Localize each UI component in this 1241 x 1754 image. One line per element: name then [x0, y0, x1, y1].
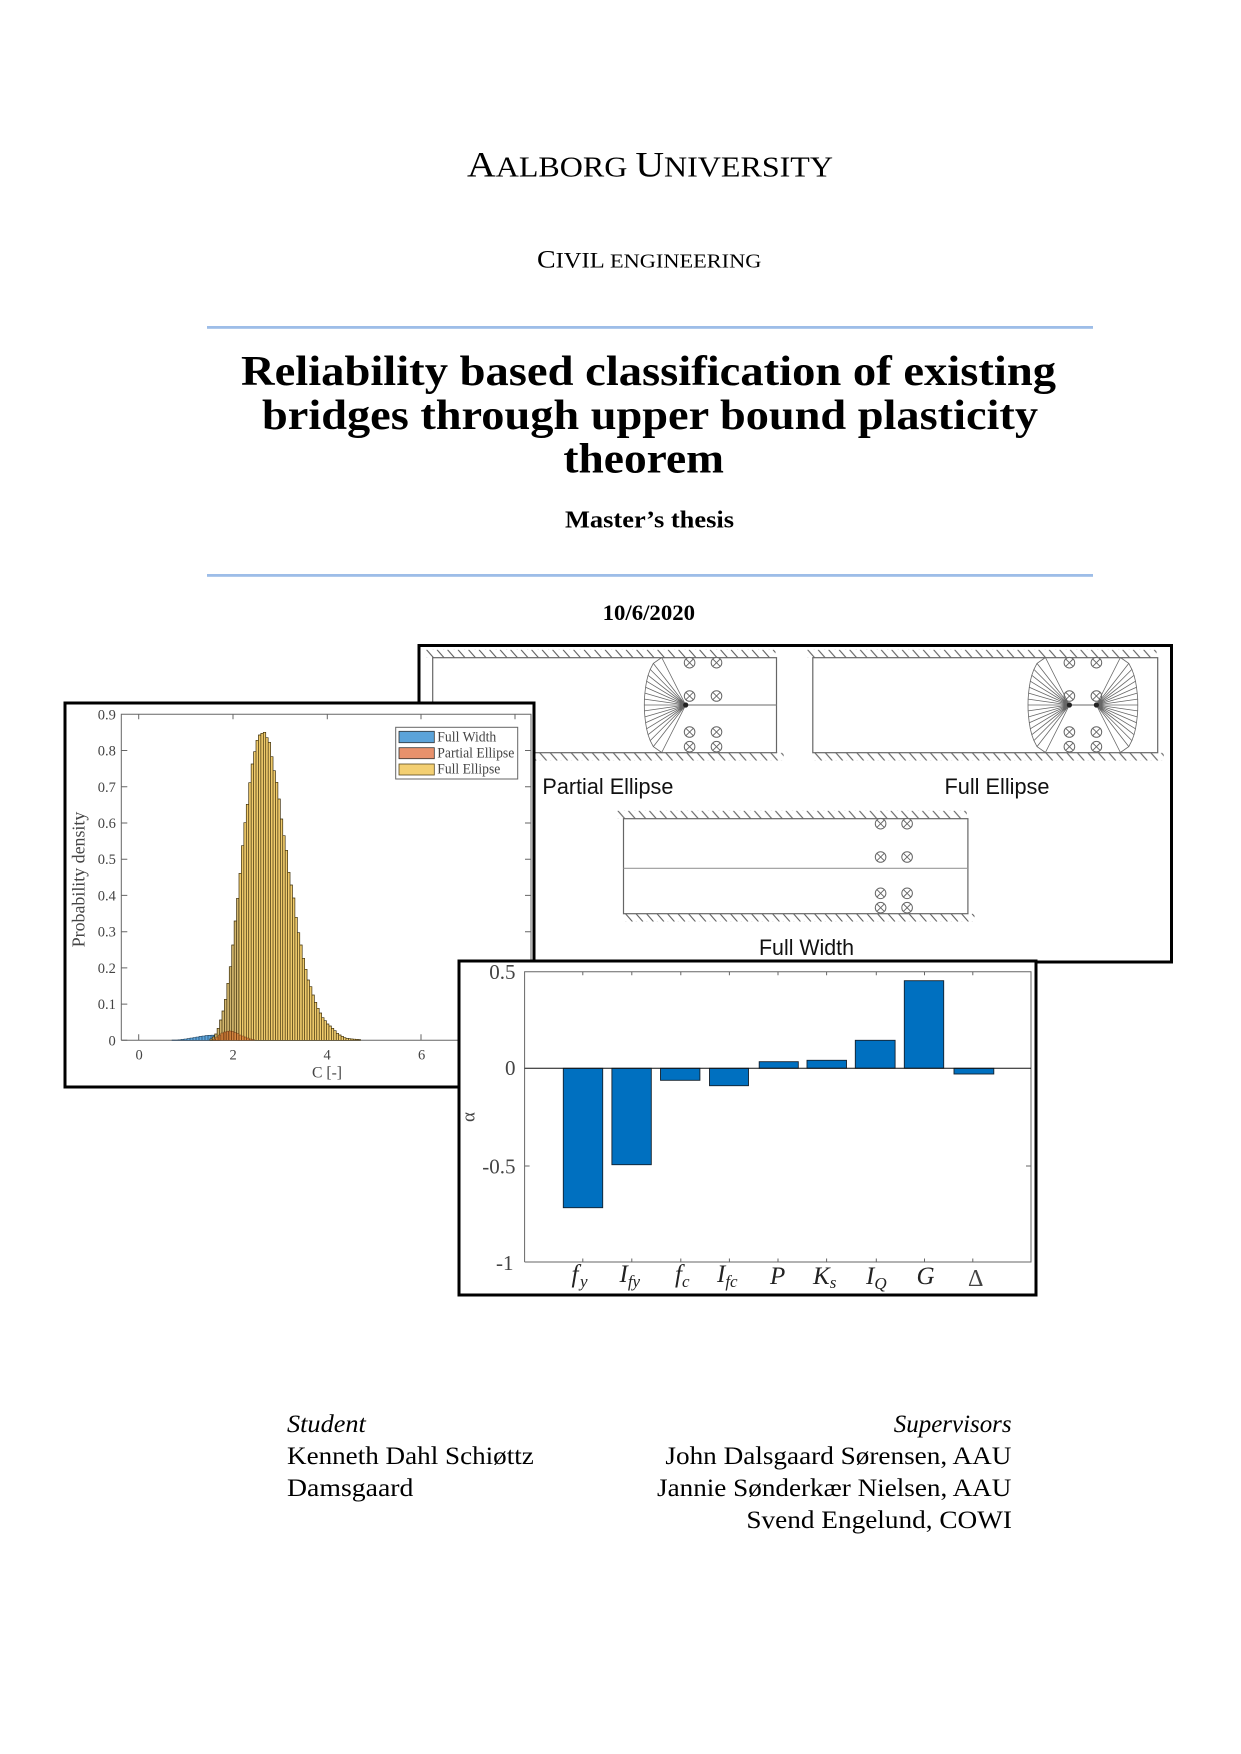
block: supervisors: John Dalsgaard Sørensen, AAU — [665, 1441, 1011, 1470]
y tick labels: 0.4 — [98, 888, 117, 904]
bars — [563, 981, 994, 1208]
x category labels: Q — [874, 1274, 887, 1293]
x category labels: fc — [725, 1272, 738, 1291]
label: partial ellipse: Partial Ellipse — [542, 774, 673, 799]
block: student: Student — [287, 1409, 367, 1438]
x category labels: s — [830, 1273, 837, 1292]
legend: Partial Ellipse — [437, 746, 514, 762]
x axis title: C [-] — [312, 1065, 342, 1082]
diagram: full ellipse — [807, 650, 1164, 761]
y axis title: Probability density — [68, 812, 88, 947]
title: theorem — [563, 437, 724, 483]
block: student: Kenneth Dahl Schiøttz — [287, 1441, 534, 1470]
x category labels: I — [620, 1261, 628, 1288]
x category labels: c — [682, 1272, 690, 1291]
x category labels — [572, 1261, 983, 1293]
y tick labels: 0.5 — [98, 852, 116, 868]
label: full width: Full Width — [759, 935, 854, 960]
block: supervisors — [657, 1409, 1012, 1534]
date: 10/6/2020 — [603, 600, 695, 625]
block: student — [287, 1409, 534, 1502]
x tick labels: 4 — [324, 1048, 332, 1064]
y tick labels: 0.8 — [98, 744, 116, 760]
heading: university: AALBORG UNIVERSITY — [467, 145, 833, 185]
x tick labels — [136, 1048, 425, 1064]
x category labels: I — [866, 1263, 874, 1290]
y tick labels: 0.6 — [98, 816, 116, 832]
x tick labels: 6 — [418, 1048, 425, 1064]
x category labels: Δ — [968, 1266, 983, 1292]
label: full ellipse: Full Ellipse — [944, 774, 1050, 799]
histogram: partial ellipse — [213, 1031, 255, 1040]
x category labels: P — [769, 1263, 785, 1290]
y tick labels: 0.3 — [98, 924, 116, 940]
histogram: full ellipse, left flank — [210, 898, 239, 1040]
y tick labels: -1 — [496, 1251, 514, 1275]
title: bridges through upper bound plasticity — [262, 393, 1038, 439]
y tick labels — [482, 960, 516, 1275]
axes and ticks — [121, 714, 531, 1040]
histogram: full width — [172, 1035, 220, 1040]
panel: probability density histogram — [65, 703, 534, 1087]
y tick labels: 0.5 — [489, 960, 516, 984]
y tick labels: 0 — [505, 1056, 516, 1080]
block: supervisors: Jannie Sønderkær Nielsen, AAU — [657, 1473, 1011, 1502]
y tick labels: 0 — [108, 1034, 116, 1050]
x category labels: f — [572, 1261, 578, 1288]
y tick labels: 0.2 — [98, 961, 116, 977]
block: supervisors: Svend Engelund, COWI — [746, 1505, 1012, 1534]
diagram: full width — [617, 811, 974, 922]
y axis title: α — [458, 1112, 480, 1122]
legend: Full Ellipse — [437, 762, 500, 778]
title — [241, 349, 1056, 483]
legend — [396, 727, 518, 779]
y tick labels — [98, 708, 117, 1050]
panel: yield line diagrams — [419, 646, 1172, 962]
histogram: full ellipse, main body — [239, 732, 360, 1040]
x category labels: y — [578, 1272, 588, 1291]
heading: department: CIVIL ENGINEERING — [537, 247, 761, 274]
subtitle: thesis type: Master’s thesis — [565, 508, 734, 534]
title: Reliability based classification of existing — [241, 349, 1056, 395]
y tick labels: 0.9 — [98, 708, 116, 724]
block: student: Damsgaard — [287, 1473, 414, 1502]
x category labels: K — [813, 1263, 830, 1290]
y tick labels: 0.1 — [98, 997, 116, 1013]
panel: sensitivity bar chart — [458, 960, 1036, 1295]
x tick labels: 2 — [230, 1048, 237, 1064]
block: supervisors: Supervisors — [894, 1409, 1012, 1438]
x category labels: I — [717, 1261, 725, 1288]
axes and ticks — [525, 972, 1031, 1262]
legend: Full Width — [437, 730, 497, 746]
x tick labels: 0 — [136, 1048, 143, 1064]
x category labels: G — [916, 1263, 935, 1290]
y tick labels: -0.5 — [482, 1154, 516, 1178]
x category labels: fy — [628, 1272, 641, 1291]
x category labels: f — [675, 1261, 682, 1288]
y tick labels: 0.7 — [98, 780, 116, 796]
diagram: partial ellipse — [426, 650, 784, 761]
